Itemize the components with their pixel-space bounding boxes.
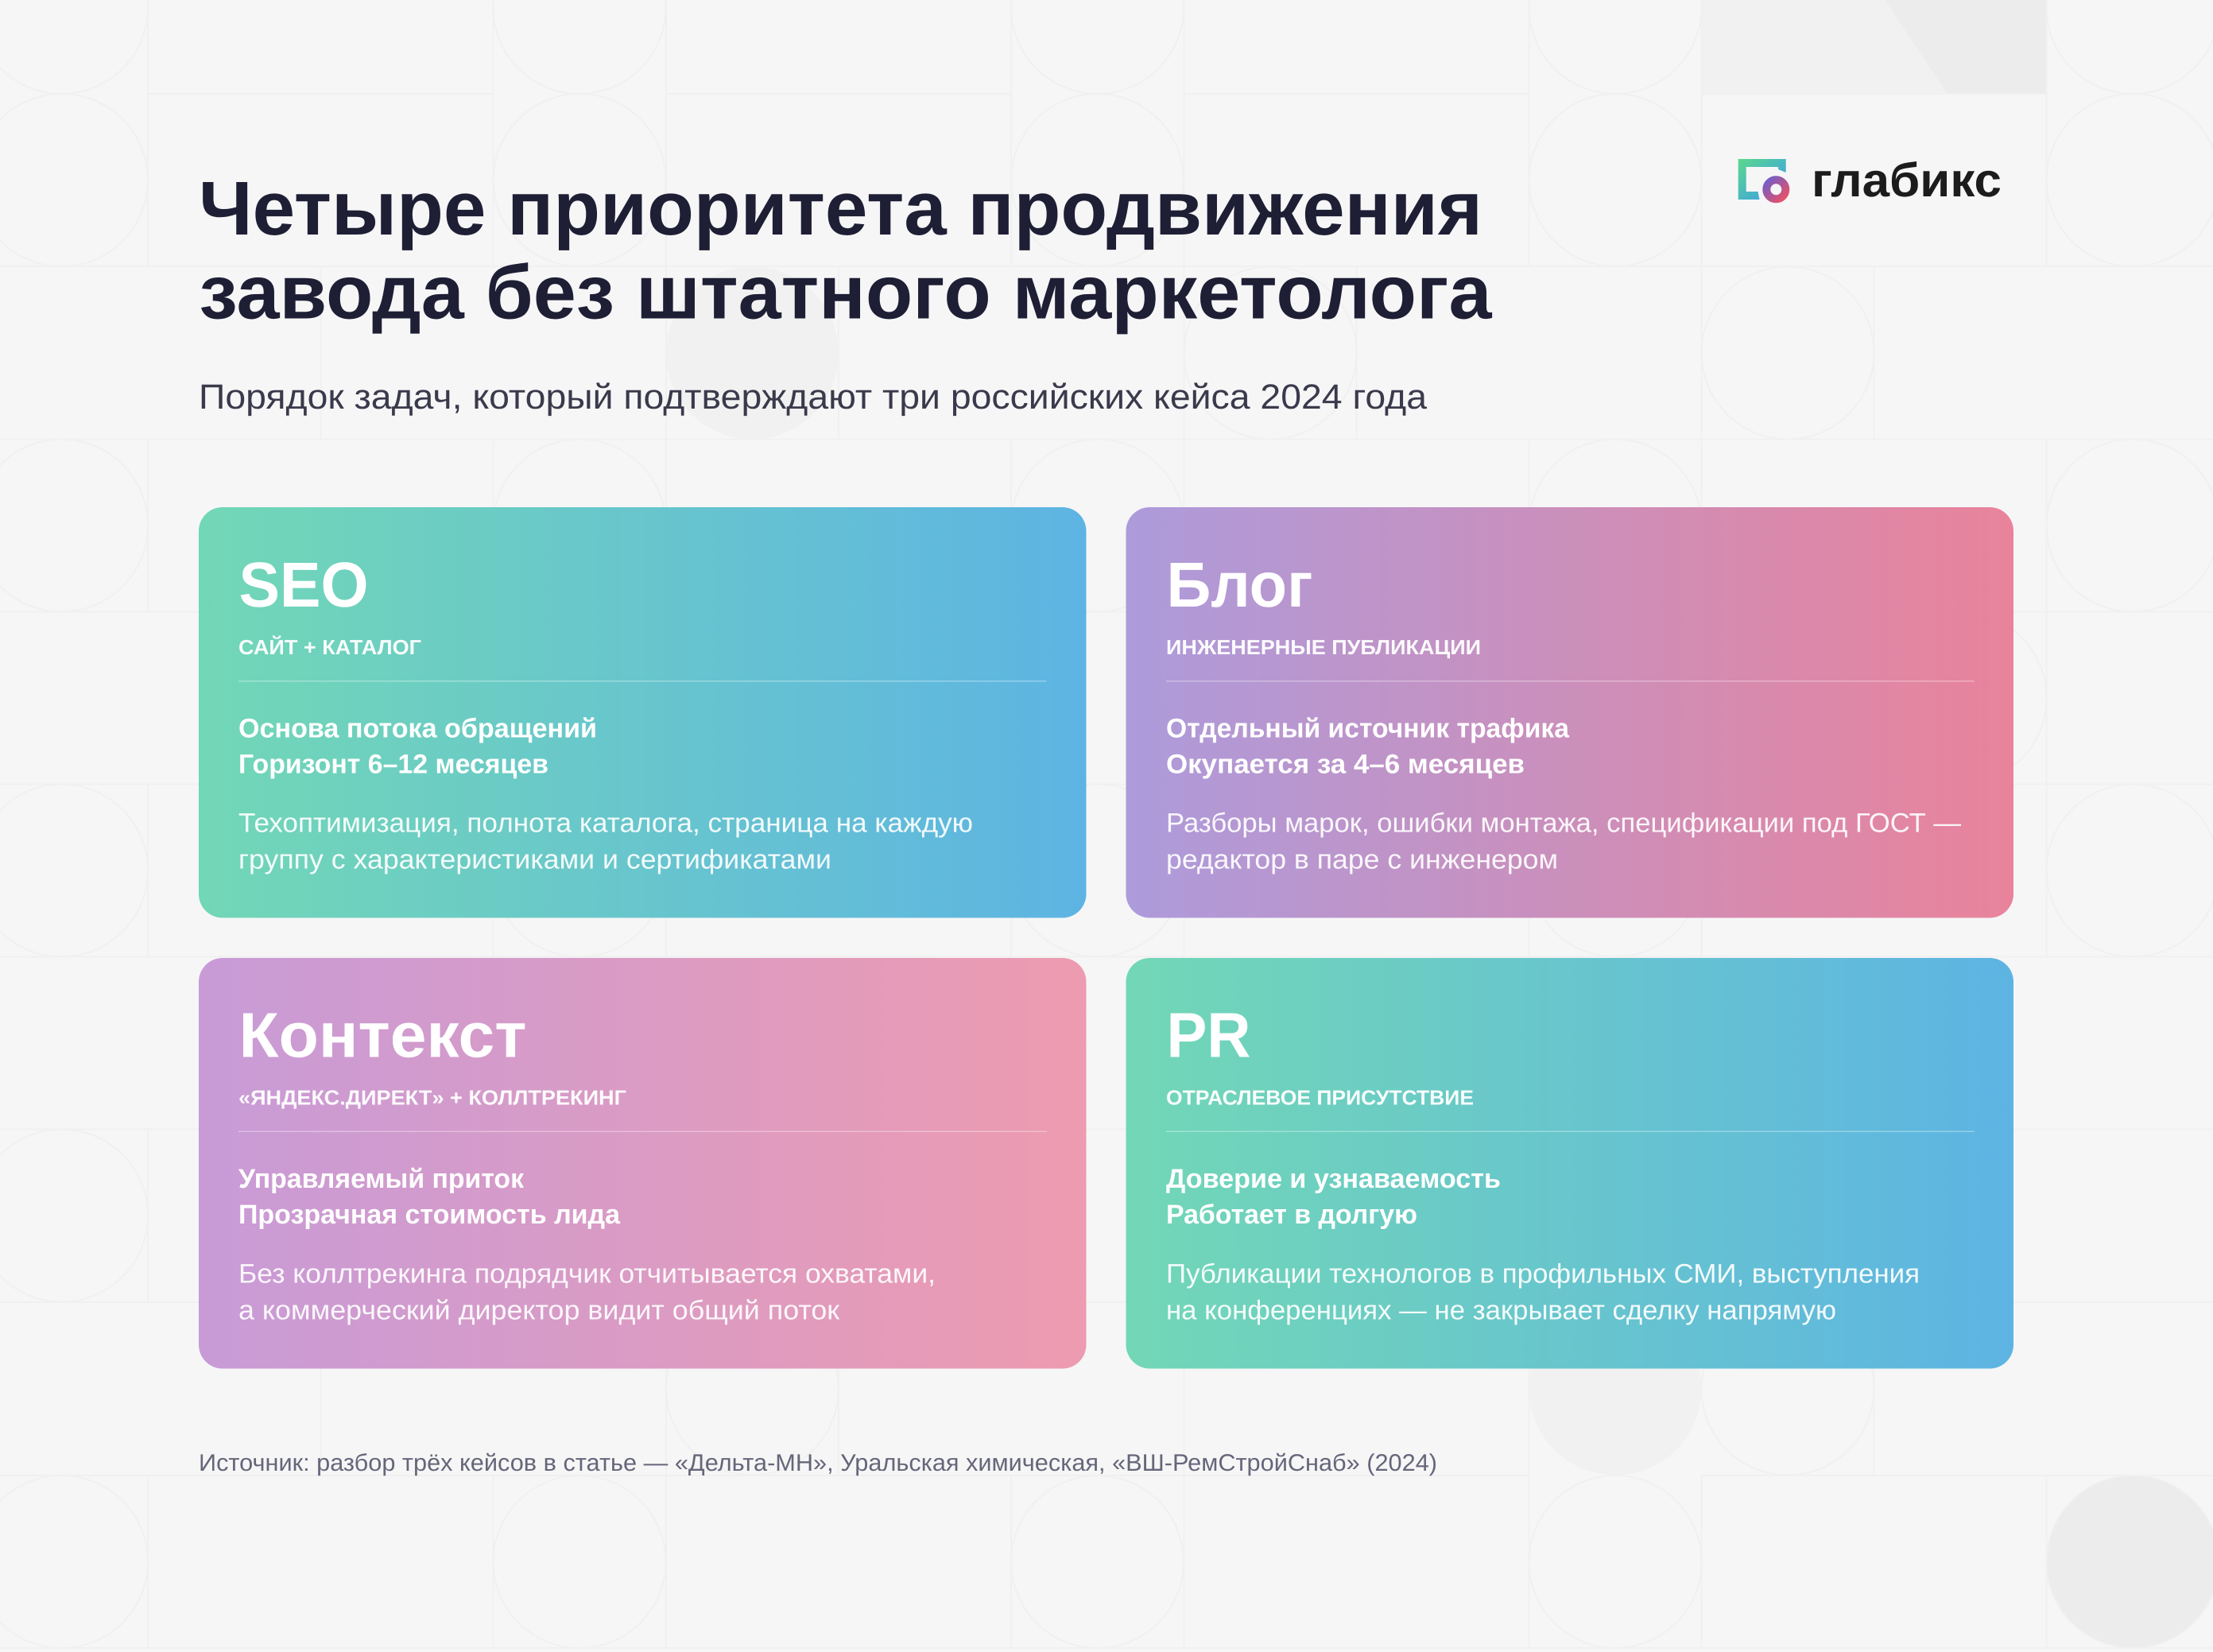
description: PR: Публикации технологов в профильных СМИ, выступления [1166,1259,1920,1289]
heading: Контекст: Контекст [238,1000,526,1070]
footer source note: Источник: разбор трёх кейсов в статье — «Дельта-МН», Уральская химическая, «ВШ-РемСтройСнаб» (2024) [199,1450,1437,1476]
key points: SEO [238,714,597,779]
heading: PR: PR [1167,1000,1251,1070]
description: Контекст [238,1259,936,1326]
panel: SEO [199,507,1086,917]
key points: PR: Доверие и узнаваемость [1166,1164,1501,1194]
key points: Блог [1166,714,1570,779]
key points: Контекст: Управляемый приток [238,1164,525,1194]
subheading: Контекст: «ЯНДЕКС.ДИРЕКТ» + КОЛЛТРЕКИНГ [238,1086,626,1110]
title: Четыре приоритета продвижения [199,166,1482,251]
panel: PR [1126,958,2013,1369]
heading: SEO: SEO [238,549,369,620]
subheading: PR: ОТРАСЛЕВОЕ ПРИСУТСТВИЕ [1166,1086,1474,1110]
logo wordmark: глабикс [1812,153,2002,207]
key points: Блог: Отдельный источник трафика [1166,714,1570,744]
key points: SEO: Основа потока обращений [238,714,597,744]
subtitle: Порядок задач, который подтверждают три российских кейса 2024 года [199,378,1428,417]
description: SEO: группу с характеристиками и сертификатами [238,844,831,874]
key points: Контекст [238,1164,621,1230]
description: SEO: Техоптимизация, полнота каталога, страница на каждую [238,808,973,838]
description: Контекст: Без коллтрекинга подрядчик отчитывается охватами, [238,1259,936,1289]
heading: Блог: Блог [1167,549,1313,620]
icon: logo mark [1738,159,1786,200]
key points: Контекст: Прозрачная стоимость лида [238,1200,621,1230]
panel: Контекст [199,958,1086,1369]
description: Контекст: а коммерческий директор видит общий поток [238,1296,840,1326]
description: Блог: Разборы марок, ошибки монтажа, спецификации под ГОСТ — [1166,808,1961,838]
title [199,166,1492,335]
key points: PR [1166,1164,1501,1230]
title: завода без штатного маркетолога [199,250,1492,335]
description: Блог [1166,808,1961,874]
subheading: SEO: САЙТ + КАТАЛОГ [238,635,421,659]
key points: SEO: Горизонт 6–12 месяцев [238,749,548,779]
description: Блог: редактор в паре с инженером [1166,844,1558,874]
logo [1738,153,2002,207]
key points: PR: Работает в долгую [1166,1200,1417,1230]
subheading: Блог: ИНЖЕНЕРНЫЕ ПУБЛИКАЦИИ [1166,635,1481,659]
description: PR: на конференциях — не закрывает сделку напрямую [1166,1296,1836,1326]
panel: Блог [1126,507,2013,917]
description: PR [1166,1259,1920,1326]
key points: Блог: Окупается за 4–6 месяцев [1166,749,1525,779]
description: SEO [238,808,973,874]
